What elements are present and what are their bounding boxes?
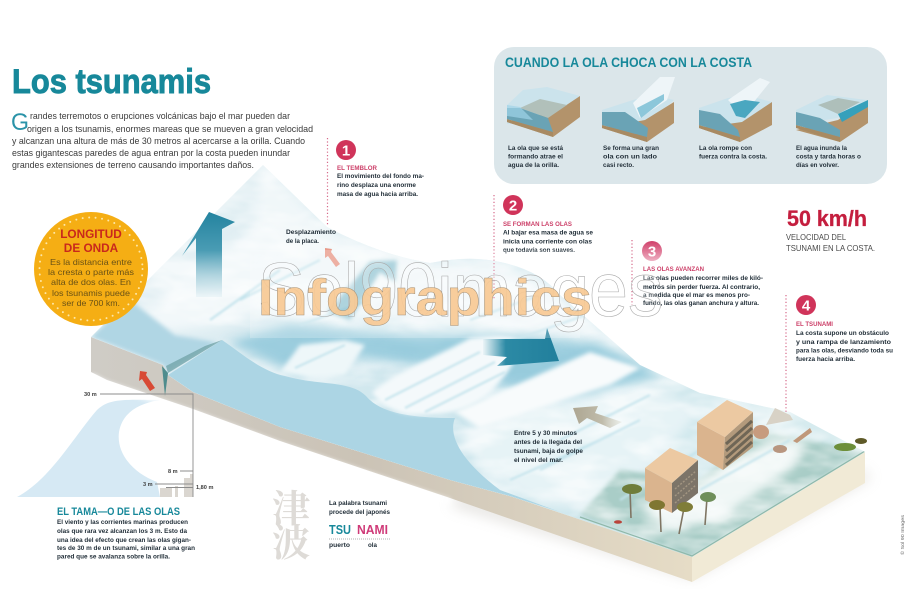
etymology block: TSU	[329, 522, 351, 537]
coast edge	[580, 451, 865, 556]
intro paragraph: randes terremotos o erupciones volcánicas bajo el mar pueden dar	[30, 111, 290, 121]
gray arrow left	[573, 406, 622, 428]
callout 4: el tsunami: EL TSUNAMI	[796, 321, 833, 328]
small teal curved arrow	[327, 260, 397, 320]
white wave crest large	[372, 336, 520, 414]
left block blue water	[91, 300, 218, 372]
callout 3: las olas avanzan: LAS OLAS AVANZAN	[643, 266, 704, 273]
callout 2: se forman las olas: que todavía son suaves.	[503, 247, 575, 254]
speed stat: TSUNAMI EN LA COSTA.	[786, 243, 875, 253]
caption 3	[699, 145, 767, 160]
right face	[692, 452, 865, 582]
scale lines	[100, 394, 193, 497]
callout 4: el tsunami: fuerza hacia arriba.	[796, 356, 855, 363]
intro paragraph	[11, 109, 313, 170]
red boat debris	[614, 520, 622, 524]
etymology block: procede del japonés	[329, 509, 390, 516]
diagram 1: ola formándose	[507, 87, 580, 137]
caption 3: fuerza contra la costa.	[699, 154, 767, 160]
panel: cuando la ola choca con la costa	[494, 47, 887, 184]
panel heading: CUANDO LA OLA CHOCA CON LA COSTA	[505, 55, 752, 70]
note: nivel del mar: antes de la llegada del	[514, 439, 582, 446]
callout 1: el temblor: 1	[342, 142, 350, 160]
scale labels	[84, 392, 213, 491]
scale labels: 3 m	[143, 482, 153, 488]
note: desplazamiento	[286, 229, 336, 245]
yellow callout: longitud de onda: alta de dos olas. En	[51, 278, 131, 287]
note: nivel del mar	[514, 430, 583, 464]
long foam streak	[455, 352, 640, 428]
smooth front water	[168, 340, 560, 512]
wave silhouette	[17, 400, 160, 497]
caption 1: La ola que se está	[508, 145, 564, 152]
pink displacement arrow	[325, 248, 340, 267]
etymology block: ola	[368, 542, 377, 549]
callout 3: las olas avanzan: metros sin perder fuerza. Al contrario,	[643, 284, 760, 291]
watermark: outline: Sol90images	[258, 248, 663, 333]
isometric ocean block	[91, 165, 865, 582]
note: nivel del mar: Entre 5 y 30 minutos	[514, 430, 578, 437]
dark blue troughs	[225, 325, 660, 400]
foam near shore	[460, 380, 700, 510]
scale labels: 30 m	[84, 392, 97, 398]
block shadow	[450, 470, 870, 578]
red arrow at fault	[139, 371, 155, 391]
soft bottom edge of the front face	[91, 376, 450, 502]
callout 2: se forman las olas: 2	[509, 198, 517, 214]
teal arrow right	[483, 328, 559, 366]
caption 4: costa y tarda horas o	[796, 154, 861, 160]
title: Los tsunamis	[12, 63, 211, 101]
callout 3: las olas avanzan: a medida que el mar es menos pro-	[643, 292, 750, 299]
wave size text block: El viento y las corrientes marinas producen	[57, 519, 188, 526]
yellow callout: longitud de onda: Es la distancia entre	[50, 258, 132, 267]
etymology block: NAMI	[357, 522, 388, 537]
intro paragraph: y alcanzan una altura de más de 30 metros al acercarse a la orilla. Cuando	[12, 136, 305, 146]
callout 1: el temblor: El movimiento del fondo ma-	[337, 173, 424, 180]
note: nivel del mar: tsunami, baja de golpe	[514, 448, 583, 455]
callout 2: se forman las olas: inicia una corriente con olas	[503, 238, 593, 246]
wave size text block: pared que se avalanza sobre la orilla.	[57, 554, 170, 560]
callout 1: el temblor: EL TEMBLOR	[337, 165, 377, 172]
note: desplazamiento: de la placa.	[286, 238, 319, 245]
callout 3: las olas avanzan: 3	[648, 244, 656, 260]
building and people silhouettes	[160, 474, 193, 497]
wave size text block: olas que rara vez alcanzan los 3 m. Esto da	[57, 528, 187, 535]
caption 4	[796, 145, 861, 169]
watermark: infographics: Infographics	[258, 269, 592, 326]
palm trees	[622, 438, 867, 534]
diagram 3: ola rompe	[699, 78, 772, 142]
debris	[753, 408, 812, 453]
yellow callout: longitud de onda: la cresta o parte más	[48, 268, 134, 277]
callout 2: se forman las olas: SE FORMAN LAS OLAS	[503, 221, 572, 228]
back swell light area	[254, 180, 611, 344]
watermark veil	[250, 250, 580, 338]
kanji: 津	[272, 478, 310, 533]
surface details clipped to block	[91, 165, 865, 557]
callout 3: las olas avanzan: fundo, las olas ganan anchura y altura.	[643, 300, 759, 307]
wave size text block	[57, 506, 195, 560]
intro paragraph: origen a los tsunamis, enormes mareas que se mueven a gran velocidad	[27, 124, 313, 134]
yellow callout: longitud de onda: ser de 700 km.	[62, 299, 120, 308]
etymology block: La palabra tsunami	[329, 500, 387, 507]
note: desplazamiento: Desplazamiento	[286, 229, 336, 236]
callout 3: las olas avanzan	[632, 240, 763, 307]
intro paragraph: grandes extensiones de terreno causando importantes daños.	[12, 160, 254, 170]
scale labels: 1,80 m	[196, 485, 213, 491]
callout 2: se forman las olas: Al bajar esa masa de agua se	[503, 230, 594, 236]
etymology block	[329, 500, 390, 549]
yellow callout: longitud de onda: los tsunamis puede	[52, 289, 130, 298]
callout 3: las olas avanzan: Las olas pueden recorrer miles de kiló-	[643, 275, 763, 282]
coast foam	[640, 440, 810, 530]
callout 4: el tsunami	[786, 295, 893, 412]
small building	[645, 448, 698, 513]
note: nivel del mar: el nivel del mar.	[514, 457, 563, 464]
callout 4: el tsunami: 4	[802, 298, 811, 314]
diagram 4: agua inunda	[796, 95, 868, 142]
caption 2	[603, 145, 659, 169]
left and front faces	[91, 337, 692, 582]
caption 1: formando atrae el	[508, 154, 563, 160]
caption 4: días en volver.	[796, 162, 839, 169]
caption 2: casi recto.	[603, 162, 634, 169]
speed stat: VELOCIDAD DEL	[786, 232, 846, 242]
coast green water	[580, 430, 865, 557]
upper foam	[153, 237, 254, 330]
intro paragraph: estas gigantescas paredes de agua entran por la costa pueden inundar	[12, 148, 290, 158]
caption 2: ola con un lado	[603, 154, 657, 160]
fault crack	[166, 340, 222, 373]
wave size text block: una idea del efecto que crean las olas gigan-	[57, 537, 191, 544]
caption 2: Se forma una gran	[603, 145, 659, 152]
speed stat: 50 km/h	[787, 206, 867, 231]
caption 1	[508, 145, 564, 169]
diagram 2: ola casi recta	[602, 77, 675, 142]
speed stat	[786, 206, 875, 253]
large building	[697, 400, 753, 470]
kanji	[272, 478, 310, 567]
water surface	[91, 165, 865, 557]
kanji: 波	[272, 512, 310, 567]
yellow callout: longitud de onda: LONGITUD	[60, 227, 122, 241]
wave size text block: EL TAMA—O DE LAS OLAS	[57, 506, 180, 518]
callout 1: el temblor: masa de agua hacia arriba.	[337, 191, 418, 198]
building and coast scene	[614, 400, 867, 534]
diagonal foam streaks	[210, 260, 790, 500]
caption 4: El agua inunda la	[796, 145, 847, 152]
white wave crest left	[280, 340, 365, 378]
callout 4: el tsunami: y una rampa de lanzamiento	[796, 339, 891, 346]
caption 3: La ola rompe con	[699, 145, 752, 152]
big teal arrow up	[182, 212, 235, 297]
yellow callout: longitud de onda: DE ONDA	[64, 241, 119, 255]
yellow callout: longitud de onda	[34, 212, 148, 326]
caption 1: agua de la orilla.	[508, 162, 559, 169]
callout 4: el tsunami: para las olas, desviando toda su	[796, 348, 893, 354]
callout 1: el temblor	[328, 138, 424, 226]
credit: © Sol 90 Images	[899, 514, 905, 555]
callout 4: el tsunami: La costa supone un obstáculo	[796, 330, 889, 337]
callout 1: el temblor: rino desplaza una enorme	[337, 182, 416, 189]
scale labels: 8 m	[168, 469, 178, 475]
foam texture	[91, 165, 865, 557]
callout 2: se forman las olas	[494, 195, 594, 300]
wave size text block: tes de 30 m de un tsunami, similar a una gran	[57, 545, 195, 552]
etymology block: puerto	[329, 542, 350, 549]
drop cap: G	[11, 109, 29, 136]
